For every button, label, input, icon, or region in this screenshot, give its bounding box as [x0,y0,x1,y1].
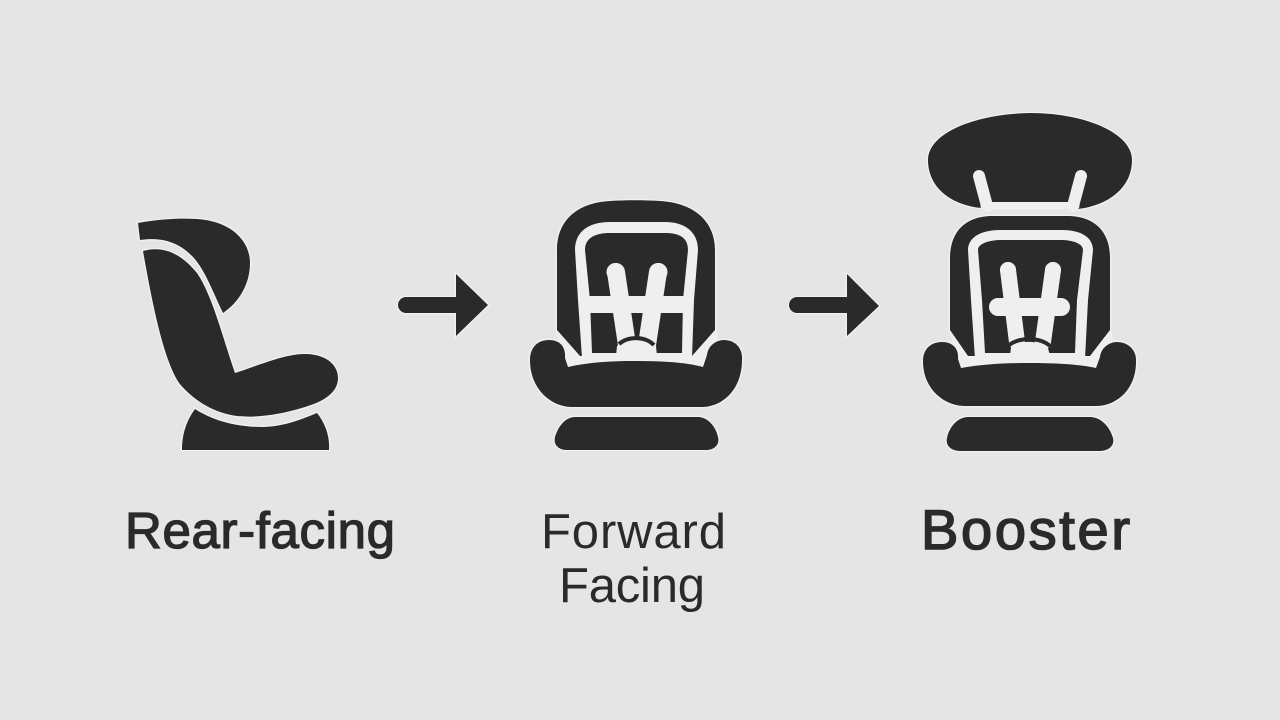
icon: forward facing car seat [530,200,742,450]
forward seat cushion [530,340,742,407]
rear-facing headrest [138,219,250,313]
arrow: forward facing to booster [789,274,879,336]
booster frame [968,230,1093,359]
icon: rear-facing car seat [138,219,338,450]
booster seat back [950,216,1110,356]
forward white backing [555,331,718,370]
booster white backing [948,331,1113,371]
label: booster: Booster [921,498,1130,561]
booster seat cushion [923,342,1136,406]
forward buckle [616,338,657,356]
icon: booster seat [923,113,1136,451]
booster base [947,417,1113,451]
label: forward facing: Forward [541,505,726,559]
booster harness [998,262,1061,342]
label: forward facing [541,505,726,613]
forward harness [586,263,688,345]
rear-facing base [182,409,329,450]
booster inner panel [978,240,1083,353]
rear-facing seat body [143,249,338,417]
label: rear-facing: Rear-facing [125,502,395,559]
booster headrest posts [979,176,1081,206]
booster buckle [1009,339,1050,356]
forward inner panel [585,233,688,353]
forward base [555,417,718,450]
forward seat back [557,200,715,356]
arrow: rear-facing to forward facing [398,274,488,336]
forward frame [575,222,698,358]
booster headrest [928,113,1132,209]
label: forward facing: Facing [559,559,705,613]
